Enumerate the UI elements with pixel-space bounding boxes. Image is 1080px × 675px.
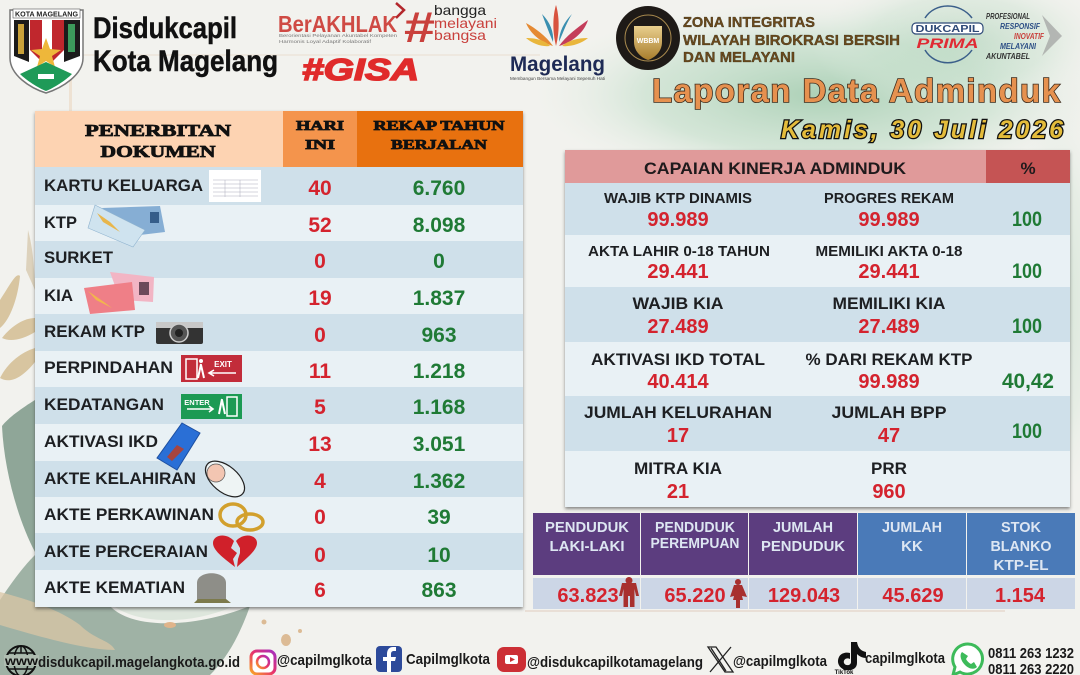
row: Perpindahan: 1.218: [413, 360, 466, 383]
row: Akta Lahir 0-18: 29.441: [858, 261, 920, 283]
row: Wajib KIA: MEMILIKI KIA: [832, 294, 946, 313]
row: Jumlah Kelurahan: 100: [1012, 420, 1042, 443]
icon: facebook: [376, 646, 402, 672]
row: Jumlah Kelurahan: JUMLAH KELURAHAN: [584, 403, 772, 422]
logo: bangga melayani bangsa: #: [404, 3, 435, 52]
row: Jumlah Kelurahan: JUMLAH BPP: [832, 403, 946, 422]
row: Wajib KTP Dinamis: PROGRES REKAM: [824, 190, 954, 207]
logo: Kota Magelang coat of arms: KOTA MAGELANG: [15, 10, 78, 18]
panel: capaian kinerja adminduk table: [565, 150, 1070, 507]
stat: Jumlah Penduduk: 129.043: [768, 585, 840, 607]
row: Akte Kematian: AKTE KEMATIAN: [44, 578, 185, 597]
row: Wajib KIA: 27.489: [858, 316, 920, 338]
row: Mitra KIA: PRR: [871, 459, 907, 478]
logo: bangga melayani bangsa: melayani: [434, 15, 497, 31]
tiktok handle: capilmglkota: [865, 650, 946, 667]
stat: Jumlah KK: 45.629: [882, 585, 944, 607]
panel: penerbitan dokumen table: [35, 111, 523, 607]
motto: Profesional Responsif Inovatif Melayani Akuntabel: [985, 12, 1062, 61]
row: Rekam KTP: 963: [421, 324, 457, 347]
row: Akta Lahir 0-18: AKTA LAHIR 0-18 TAHUN: [588, 243, 770, 260]
row: Surket: 0: [433, 250, 445, 273]
row: Kartu Keluarga: KARTU KELUARGA: [44, 176, 203, 195]
row: Aktivasi IKD Total: [591, 350, 1054, 393]
logo: BerAKHLAK: Harmonis Loyal Adaptif Kolaboratif: [279, 39, 372, 44]
heading: Disdukcapil Kota Magelang: Kota Magelang: [93, 45, 278, 78]
row: Akta Lahir 0-18: 100: [1012, 260, 1042, 283]
motto: Profesional Responsif Inovatif Melayani Akuntabel: RESPONSIF: [1000, 22, 1041, 31]
row: Mitra KIA: 960: [872, 481, 906, 503]
row: Aktivasi IKD Total: 40.414: [647, 371, 709, 393]
stat: Jumlah KK: [858, 513, 966, 609]
row: KTP: KTP: [44, 213, 77, 232]
text: Zona Integritas Wilayah Birokrasi Bersih dan Melayani: DAN MELAYANI: [683, 49, 795, 66]
table header: CAPAIAN KINERJA ADMINDUK: [644, 159, 907, 178]
stat: Stok Blanko KTP-EL: KTP-EL: [994, 557, 1048, 574]
row: Kedatangan: 1.168: [413, 396, 466, 419]
stat: Penduduk Laki-laki: LAKI-LAKI: [550, 538, 624, 555]
X handle: @capilmglkota: [733, 653, 828, 670]
icon: instagram: [251, 651, 275, 674]
row: Akte Perceraian: AKTE PERCERAIAN: [44, 542, 208, 561]
logo: Dukcapil Prima: PRIMA: [916, 35, 978, 51]
row: Surket: SURKET: [44, 248, 114, 267]
website: disdukcapil.magelangkota.go.id: [38, 654, 240, 671]
panel: population statistics: [533, 513, 1075, 609]
text: Zona Integritas Wilayah Birokrasi Bersih dan Melayani: WILAYAH BIROKRASI BERSIH: [683, 32, 900, 49]
motto: Profesional Responsif Inovatif Melayani Akuntabel: INOVATIF: [1014, 32, 1045, 41]
stat: Jumlah KK: KK: [901, 538, 923, 555]
row: Kartu Keluarga: 40: [308, 177, 332, 200]
row: KTP: [44, 205, 466, 247]
logo: Kota Magelang coat of arms: [10, 9, 83, 93]
text: Zona Integritas Wilayah Birokrasi Bersih dan Melayani: ZONA INTEGRITAS: [683, 14, 815, 31]
motto: Profesional Responsif Inovatif Melayani Akuntabel: PROFESIONAL: [986, 12, 1030, 21]
row: Rekam KTP: [44, 322, 457, 347]
youtube handle: @disdukcapilkotamagelang: [527, 654, 703, 671]
heading: Disdukcapil Kota Magelang: [93, 12, 278, 78]
motto: Profesional Responsif Inovatif Melayani Akuntabel: AKUNTABEL: [985, 52, 1030, 61]
logo: Dukcapil Prima: DUKCAPIL: [916, 24, 980, 35]
stat: Stok Blanko KTP-EL: STOK: [1001, 519, 1041, 536]
logo: #GISA: #GISA: [302, 52, 419, 87]
row: Surket: 0: [314, 250, 326, 273]
stat: Jumlah Penduduk: JUMLAH: [773, 519, 833, 536]
row: Jumlah Kelurahan: 17: [667, 425, 689, 447]
icon: male figure: [619, 577, 639, 607]
row: Aktivasi IKD Total: 99.989: [858, 371, 920, 393]
row: Wajib KTP Dinamis: [604, 190, 1042, 231]
table header: HARI: [296, 119, 344, 134]
row: KIA: 1.837: [413, 287, 465, 310]
row: Wajib KIA: WAJIB KIA: [632, 294, 724, 313]
facebook handle: Capilmglkota: [406, 651, 491, 668]
row: Wajib KTP Dinamis: 99.989: [858, 209, 920, 231]
row: Akte Perceraian: 0: [314, 544, 326, 567]
logo: BerAKHLAK: [278, 3, 404, 44]
row: Wajib KTP Dinamis: 99.989: [647, 209, 709, 231]
icon: female figure: [730, 579, 747, 608]
row: Wajib KIA: [632, 294, 1042, 338]
row: Akte Kelahiran: AKTE KELAHIRAN: [44, 469, 196, 488]
row: Perpindahan: EXIT: [214, 360, 232, 369]
instagram handle: @capilmglkota: [277, 652, 373, 669]
row: Akte Kematian: [44, 573, 457, 603]
stat: Jumlah Penduduk: [749, 513, 857, 609]
stat: Penduduk Perempuan: 65.220: [664, 585, 726, 607]
row: Perpindahan: PERPINDAHAN: [44, 358, 173, 377]
row: Akte Kelahiran: 4: [314, 470, 326, 493]
row: Surket: [44, 248, 445, 273]
icon: X: [708, 647, 733, 672]
stat: Stok Blanko KTP-EL: 1.154: [995, 585, 1046, 607]
row: Jumlah Kelurahan: [584, 403, 1042, 447]
logo: Zona Integritas badge: [616, 6, 680, 70]
row: Aktivasi IKD: [44, 423, 466, 470]
icon: youtube: [497, 647, 526, 672]
table header: [565, 150, 1070, 183]
table header: %: [1020, 159, 1036, 178]
row: Wajib KTP Dinamis: WAJIB KTP DINAMIS: [604, 190, 752, 207]
row: Aktivasi IKD: AKTIVASI IKD: [44, 432, 158, 451]
row: Akte Perceraian: 10: [427, 544, 451, 567]
logo: bangga melayani bangsa: bangsa: [434, 27, 486, 43]
logo: bangga melayani bangsa: bangga: [434, 2, 486, 18]
row: Akte Perkawinan: AKTE PERKAWINAN: [44, 505, 214, 524]
row: Aktivasi IKD: 3.051: [413, 433, 466, 456]
row: Akta Lahir 0-18: MEMILIKI AKTA 0-18: [816, 243, 962, 260]
row: Wajib KIA: 100: [1012, 315, 1042, 338]
date: Kamis, 30 Juli 2026: Kamis, 30 Juli 2026: [781, 116, 1064, 144]
icon: globe www: www: [4, 654, 39, 668]
table header: [35, 111, 523, 167]
row: Akta Lahir 0-18: [588, 243, 1042, 283]
row: Mitra KIA: 21: [667, 481, 689, 503]
title: Laporan Data Adminduk: Laporan Data Adminduk: [652, 72, 1061, 109]
row: Aktivasi IKD Total: AKTIVASI IKD TOTAL: [591, 350, 765, 369]
row: Kedatangan: [44, 394, 466, 419]
row: Jumlah Kelurahan: 47: [878, 425, 900, 447]
row: Wajib KIA: 27.489: [647, 316, 709, 338]
footer: contact and social media: [4, 642, 1074, 675]
logo: BerAKHLAK: BerAKHLAK: [278, 11, 397, 37]
stat: Penduduk Laki-laki: PENDUDUK: [545, 519, 629, 536]
row: Perpindahan: [44, 355, 466, 383]
row: Akte Kelahiran: 1.362: [413, 470, 465, 493]
stat: Jumlah KK: JUMLAH: [882, 519, 942, 536]
row: Aktivasi IKD Total: % DARI REKAM KTP: [806, 350, 972, 369]
logo: Magelang: Magelang: [510, 53, 605, 76]
stat: Jumlah Penduduk: PENDUDUK: [761, 538, 845, 555]
row: Akta Lahir 0-18: 29.441: [647, 261, 709, 283]
row: Kedatangan: 5: [314, 396, 326, 419]
row: Akte Kelahiran: [44, 454, 465, 504]
phone numbers: [988, 645, 1074, 675]
row: KIA: 19: [308, 287, 332, 310]
stat: Penduduk Perempuan: PEREMPUAN: [650, 535, 740, 552]
row: Akte Kematian: 6: [314, 579, 326, 602]
row: KTP: 8.098: [413, 214, 466, 237]
table header: DOKUMEN: [100, 142, 216, 161]
row: Kartu Keluarga: 6.760: [413, 177, 465, 200]
table header: PENERBITAN: [85, 121, 232, 140]
logo: Zona Integritas badge: WBBM: [637, 38, 659, 45]
motto: Profesional Responsif Inovatif Melayani Akuntabel: MELAYANI: [1000, 42, 1037, 51]
row: Akte Kematian: 863: [421, 579, 457, 602]
icon: whatsapp: [953, 644, 982, 675]
row: Akte Perkawinan: [44, 504, 451, 530]
table header: BERJALAN: [391, 138, 487, 153]
row: KIA: KIA: [44, 286, 73, 305]
logo: Magelang: [510, 5, 605, 82]
table header: INI: [305, 138, 335, 153]
stat: Penduduk Laki-laki: 63.823: [557, 585, 619, 607]
stat: Stok Blanko KTP-EL: BLANKO: [990, 538, 1052, 555]
row: Mitra KIA: [634, 459, 907, 503]
table header: REKAP TAHUN: [374, 119, 504, 134]
row: Perpindahan: 11: [309, 360, 331, 383]
row: Akte Perkawinan: 0: [314, 506, 326, 529]
row: KTP: 52: [308, 214, 332, 237]
logo: Magelang: Membangun Bersama Melayani Sepenuh Hati: [510, 76, 605, 82]
row: Aktivasi IKD Total: 40,42: [1002, 370, 1054, 393]
row: Kedatangan: ENTER: [184, 398, 210, 407]
row: Wajib KTP Dinamis: 100: [1012, 208, 1042, 231]
stat: Penduduk Perempuan: PENDUDUK: [655, 519, 735, 536]
stat: Stok Blanko KTP-EL: [967, 513, 1075, 609]
heading: Disdukcapil Kota Magelang: Disdukcapil: [93, 12, 237, 45]
logo: bangga melayani bangsa: [404, 2, 497, 52]
icon: tiktok: [835, 642, 866, 675]
icon: globe www: [4, 646, 39, 675]
stat: Penduduk Perempuan: [641, 513, 748, 609]
row: Aktivasi IKD: 13: [308, 433, 332, 456]
row: KIA: [44, 272, 465, 314]
row: Mitra KIA: MITRA KIA: [634, 459, 722, 478]
text: Zona Integritas Wilayah Birokrasi Bersih dan Melayani: [683, 14, 900, 66]
row: Akte Perceraian: [44, 535, 451, 567]
row: Kartu Keluarga: [44, 170, 465, 202]
row: Kedatangan: KEDATANGAN: [44, 395, 164, 414]
row: Rekam KTP: REKAM KTP: [44, 322, 145, 341]
stat: Penduduk Laki-laki: [533, 513, 640, 609]
logo: BerAKHLAK: Berorientasi Pelayanan Akuntabel Kompeten: [279, 33, 398, 38]
row: Akte Perkawinan: 39: [427, 506, 451, 529]
row: Rekam KTP: 0: [314, 324, 326, 347]
logo: Dukcapil Prima: [912, 6, 983, 63]
